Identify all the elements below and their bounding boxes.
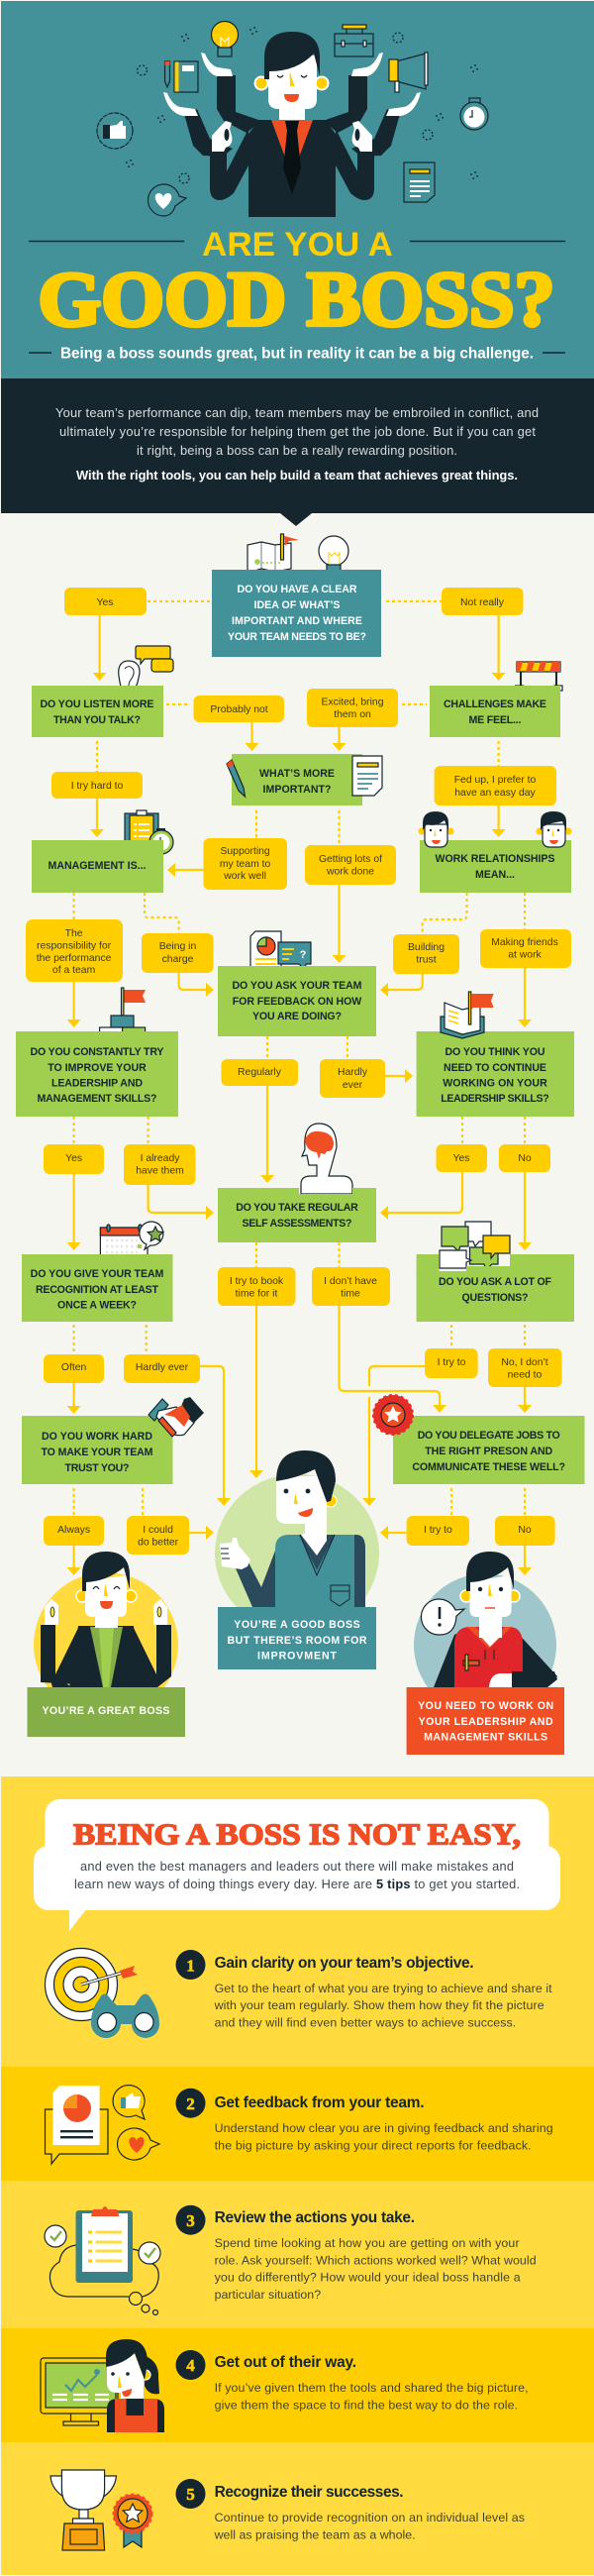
text block: intro copy: it right, being a boss can be a really rewarding position. [137,443,457,458]
outcome: needs work: YOUR LEADERSHIP AND [419,1716,553,1728]
icon: notebook [174,61,198,92]
decision: listen more [32,686,163,737]
decision: whats more important: WHAT’S MORE [259,768,335,780]
decision: delegate: COMMUNICATE THESE WELL? [412,1461,565,1473]
number badge: 2 [186,2094,195,2113]
icon: paper [352,756,382,796]
decision: self assessments: DO YOU TAKE REGULAR [236,1202,358,1214]
label: i try to [425,1348,478,1378]
icon: thumbs up badge [97,113,133,149]
decision: ask for feedback: DO YOU ASK YOUR TEAM [232,980,362,992]
tip text [214,2484,525,2542]
number badge [176,2479,206,2509]
label: i try hard to: I try hard to [71,781,123,792]
tip 5 [50,2470,525,2550]
label: regularly [222,1059,298,1086]
label: yes: Yes [65,1153,82,1164]
label: fed up: have an easy day [454,788,537,799]
decision: whats more important [232,754,362,805]
decision: challenges [430,686,560,737]
tip text: particular situation? [215,2288,321,2302]
decision: ask for feedback: YOU ARE DOING? [252,1011,342,1022]
outcome: needs work: MANAGEMENT SKILLS [424,1732,547,1744]
outcome: great boss [28,1552,185,1737]
label: being in charge: charge [162,954,194,965]
label: i could do better: I could [143,1525,173,1536]
label: yes [436,1144,487,1172]
label: not really [442,588,523,615]
illustration: great boss man [41,1552,171,1687]
outcome: good boss: BUT THERE’S ROOM FOR [228,1635,367,1647]
decision: ask for feedback: FOR FEEDBACK ON HOW [233,996,361,1008]
icon: speech bubbles [440,1222,510,1269]
decision: continue working: NEED TO CONTINUE [444,1062,546,1074]
label: excited [307,689,398,727]
label: no: No [518,1525,532,1536]
outcome: good boss: IMPROVMENT [257,1651,338,1663]
decision: recognition: ONCE A WEEK? [57,1300,137,1312]
illustration: multi-armed boss [127,28,477,217]
outcome: good boss [215,1450,379,1669]
decision: improve skills: DO YOU CONSTANTLY TRY [30,1046,164,1058]
label: building trust: trust [416,955,437,965]
label: no [495,1516,555,1546]
number badge: 1 [186,1956,195,1976]
label: excited: them on [334,709,371,720]
icon: pencil [164,61,170,87]
label: i try to book: I try to book [230,1276,284,1287]
number badge: 4 [186,2356,195,2375]
label: often [44,1354,104,1383]
callout: being a boss is not easy: and even the best managers and leaders out there will make mistakes and [80,1859,514,1874]
decision: work relationships [420,840,571,893]
tip text: Continue to provide recognition on an individual level as [215,2511,525,2524]
tip text [215,2209,537,2302]
tip 2 [46,2086,553,2164]
text block: intro copy [55,405,539,483]
icon: road barrier [515,662,562,691]
label: getting lots: Getting lots of [319,854,382,865]
label: responsibility: the performance [37,953,112,964]
icon: map and flag [248,534,299,573]
tip text: with your team regularly. Show them how they fit the picture [214,1998,544,2012]
tip text: role. Ask yourself: Which actions worked well? What would [215,2253,537,2267]
decision: ask questions: QUESTIONS? [461,1292,529,1304]
tip text: Recognize their successes. [215,2484,404,2501]
decision: ask for feedback [218,966,376,1036]
text block: intro copy: With the right tools, you can help build a team that achieves great things. [76,468,518,483]
decision: listen more: DO YOU LISTEN MORE [40,698,154,710]
decision: continue working: LEADERSHIP SKILLS? [441,1093,549,1105]
panel: flowchart [1,534,594,2575]
callout: being a boss is not easy [34,1799,560,1931]
icon: calendar and star [100,1222,163,1261]
icon: heart bubble [148,184,186,216]
callout: being a boss is not easy: learn new ways of doing things every day. Here are 5 tips to get you started. [74,1877,520,1891]
decision: clear idea [212,570,381,657]
label: i already have them: I already [141,1153,180,1164]
icon: pencil [227,760,246,797]
tip text: and they will find even better ways to achieve success. [215,2015,516,2029]
panel: header [1,1,594,378]
icon: briefcase [335,25,373,56]
icon: light bulb [212,22,238,56]
label: i try to book: time for it [236,1288,277,1300]
tip 1 [46,1948,552,2038]
decision: work hard for trust: TRUST YOU? [65,1462,129,1474]
icon: outlined bulb [319,536,348,575]
label: building trust: Building [408,942,445,953]
decision: self assessments [218,1188,376,1242]
label: no i dont need to: No, I don’t [501,1357,548,1368]
decision: improve skills: MANAGEMENT SKILLS? [38,1093,156,1105]
number badge: 5 [186,2485,195,2504]
label: responsibility: The [65,928,83,939]
decision: listen more: THAN YOU TALK? [53,714,141,726]
decision: challenges: ME FEEL... [469,714,522,726]
label: supporting: Supporting [220,846,270,857]
icon: trophy and medal [50,2470,152,2550]
icon: clipboard and stopwatch [125,810,173,854]
label: making friends [480,929,571,968]
label: no: No [518,1153,532,1164]
icon: book and flag [441,992,494,1038]
icon: clipboard and thought cloud [45,2206,160,2314]
label: not really: Not really [460,597,505,608]
decision: improve skills [16,1031,178,1117]
title: good boss: GOOD BOSS? [38,256,554,342]
tip text: give them the space to find the best way to do the role. [215,2398,518,2412]
number badge [176,2089,206,2118]
label: yes [64,588,147,615]
label: fed up [435,766,556,805]
callout: being a boss is not easy: BEING A BOSS IS NOT EASY, [73,1817,521,1851]
decision: management is [32,840,163,893]
label: building trust [393,934,459,974]
icon: blocks and flag [100,988,146,1038]
decision: clear idea: IMPORTANT AND WHERE [232,615,362,627]
icon: ear and speech [119,646,173,693]
panel: tips background [1,1776,594,2575]
decision: continue working: DO YOU THINK YOU [446,1046,544,1058]
decision: work relationships: WORK RELATIONSHIPS [436,853,554,865]
label: being in charge [142,933,214,973]
outcome: great boss: YOU’RE A GREAT BOSS [42,1705,170,1717]
label: i could do better [127,1516,189,1555]
icon: stopwatch [460,98,488,130]
label: getting lots: work done [326,866,374,878]
outcome: good boss: YOU’RE A GOOD BOSS [234,1619,360,1631]
label: excited: Excited, bring [322,698,384,707]
number badge [176,2350,206,2380]
label: hardly ever: Hardly ever [136,1362,189,1373]
outcome: needs work [407,1552,564,1755]
illustration: good boss man [220,1450,365,1607]
title: are you a: ARE YOU A [202,226,393,264]
label: supporting [204,838,287,890]
label: making friends: at work [508,949,543,961]
icon: megaphone [389,53,428,92]
decision: clear idea: DO YOU HAVE A CLEAR [238,584,357,595]
decision: challenges: CHALLENGES MAKE [444,698,546,710]
tip text: Get feedback from your team. [215,2094,425,2111]
label: supporting: work well [223,871,266,882]
label: yes: Yes [453,1153,469,1164]
label: i try to: I try to [438,1357,466,1368]
label: probably not: Probably not [210,704,268,715]
decision: delegate: DO YOU DELEGATE JOBS TO [418,1430,560,1442]
label: hardly ever [124,1354,200,1383]
number badge [176,2205,206,2235]
tip text: Understand how clear you are in giving feedback and sharing [215,2121,553,2135]
label: no i dont need to: need to [508,1369,543,1381]
label: always: Always [57,1525,90,1536]
label: hardly ever: Hardly [338,1067,368,1078]
label: regularly: Regularly [238,1067,282,1078]
label: often: Often [61,1362,87,1373]
label: hardly ever: ever [343,1080,363,1091]
icon: document [404,162,435,202]
icon: target and binoculars [46,1948,159,2038]
label: no [499,1144,550,1172]
label: responsibility: of a team [52,965,95,976]
label: responsibility [26,919,123,982]
tip text: you do differently? How would your ideal boss handle a [215,2271,521,2285]
decision: recognition: RECOGNITION AT LEAST [36,1284,159,1296]
decision: ask questions [417,1254,574,1322]
label: i try to: I try to [424,1525,452,1536]
text block: intro copy: Your team’s performance can dip, team members may be embroiled in conflict, and [55,405,539,420]
decision: management is: MANAGEMENT IS... [48,860,147,872]
decision: continue working: WORKING ON YOUR [443,1078,547,1090]
tip text [215,2354,529,2412]
decision: work hard for trust: TO MAKE YOUR TEAM [42,1447,153,1458]
decision: self assessments: SELF ASSESSMENTS? [242,1218,352,1230]
tip text: Spend time looking at how you are getting on with your [215,2236,520,2250]
connectors [74,601,525,1573]
decision: delegate: THE RIGHT PRESON AND [425,1446,553,1457]
tip text: Gain clarity on your team’s objective. [215,1955,474,1972]
icon: two faces [418,811,572,847]
label: no i dont need to [488,1348,562,1387]
label: fed up: Fed up, I prefer to [454,775,537,786]
decision: improve skills: TO IMPROVE YOUR [48,1062,147,1074]
label: i dont have time: time [341,1288,360,1300]
label: supporting: my team to [220,859,271,870]
text block: intro copy: ultimately you’re responsible for helping them get the job done. But if you can get [59,424,536,439]
icon: pie chart report and bubble: ? [300,949,307,961]
tip text: the big picture by asking your direct reports for feedback. [215,2138,532,2152]
label: yes: Yes [97,597,113,608]
label: responsibility: responsibility for [37,941,112,951]
tip text: Get to the heart of what you are trying to achieve and share it [215,1982,552,1995]
label: i dont have time [312,1267,390,1306]
label: i could do better: do better [138,1538,179,1548]
tip text: Get out of their way. [215,2354,356,2371]
subtitle: Being a boss sounds great, but in reality it can be a big challenge. [60,345,534,363]
icon: feedback report and bubbles [46,2086,159,2164]
label: getting lots [305,845,396,885]
icon: star badge [373,1395,413,1435]
decision: whats more important: IMPORTANT? [263,784,331,796]
tip text: well as praising the team as a whole. [214,2528,416,2542]
label: i already have them [124,1144,196,1185]
decision: work hard for trust [22,1416,172,1484]
decision: recognition [22,1254,172,1322]
label: yes [44,1144,104,1174]
tip text: If you’ve given them the tools and shared the big picture, [215,2381,529,2395]
icon: woman at monitor [41,2339,164,2432]
icon: head with brain [301,1124,352,1194]
icon: handshake [148,1397,204,1437]
tip text [215,2094,553,2152]
decision: continue working [417,1031,574,1117]
outcome: needs work: YOU NEED TO WORK ON [418,1700,553,1712]
decision: ask questions: DO YOU ASK A LOT OF [439,1276,552,1288]
decision: clear idea: IDEA OF WHAT’S [253,599,341,611]
decision: work hard for trust: DO YOU WORK HARD [42,1431,152,1443]
decision: work relationships: MEAN... [475,869,515,881]
decision: delegate [393,1416,584,1484]
label: making friends: Making friends [491,937,558,948]
label: being in charge: Being in [159,941,196,952]
label: always [44,1516,104,1546]
decision: recognition: DO YOU GIVE YOUR TEAM [31,1268,164,1280]
tip text [214,1955,552,2029]
decision: clear idea: YOUR TEAM NEEDS TO BE? [228,631,366,643]
tip 4 [41,2339,529,2432]
tip 3 [45,2205,537,2314]
label: i try to book [218,1267,295,1306]
icon: pie chart report and bubble [250,931,311,970]
decision: improve skills: LEADERSHIP AND [51,1078,143,1090]
label: probably not [194,696,284,722]
label: hardly ever [320,1059,385,1098]
label: i already have them: have them [136,1165,184,1177]
label: i try hard to [51,772,143,799]
number badge: 3 [186,2211,195,2230]
tip text: Review the actions you take. [215,2209,415,2226]
panel: intro [1,378,594,526]
label: i try to [407,1516,469,1546]
label: i dont have time: I don’t have [324,1276,377,1287]
number badge [176,1950,206,1980]
illustration: worried boss man [421,1552,557,1687]
